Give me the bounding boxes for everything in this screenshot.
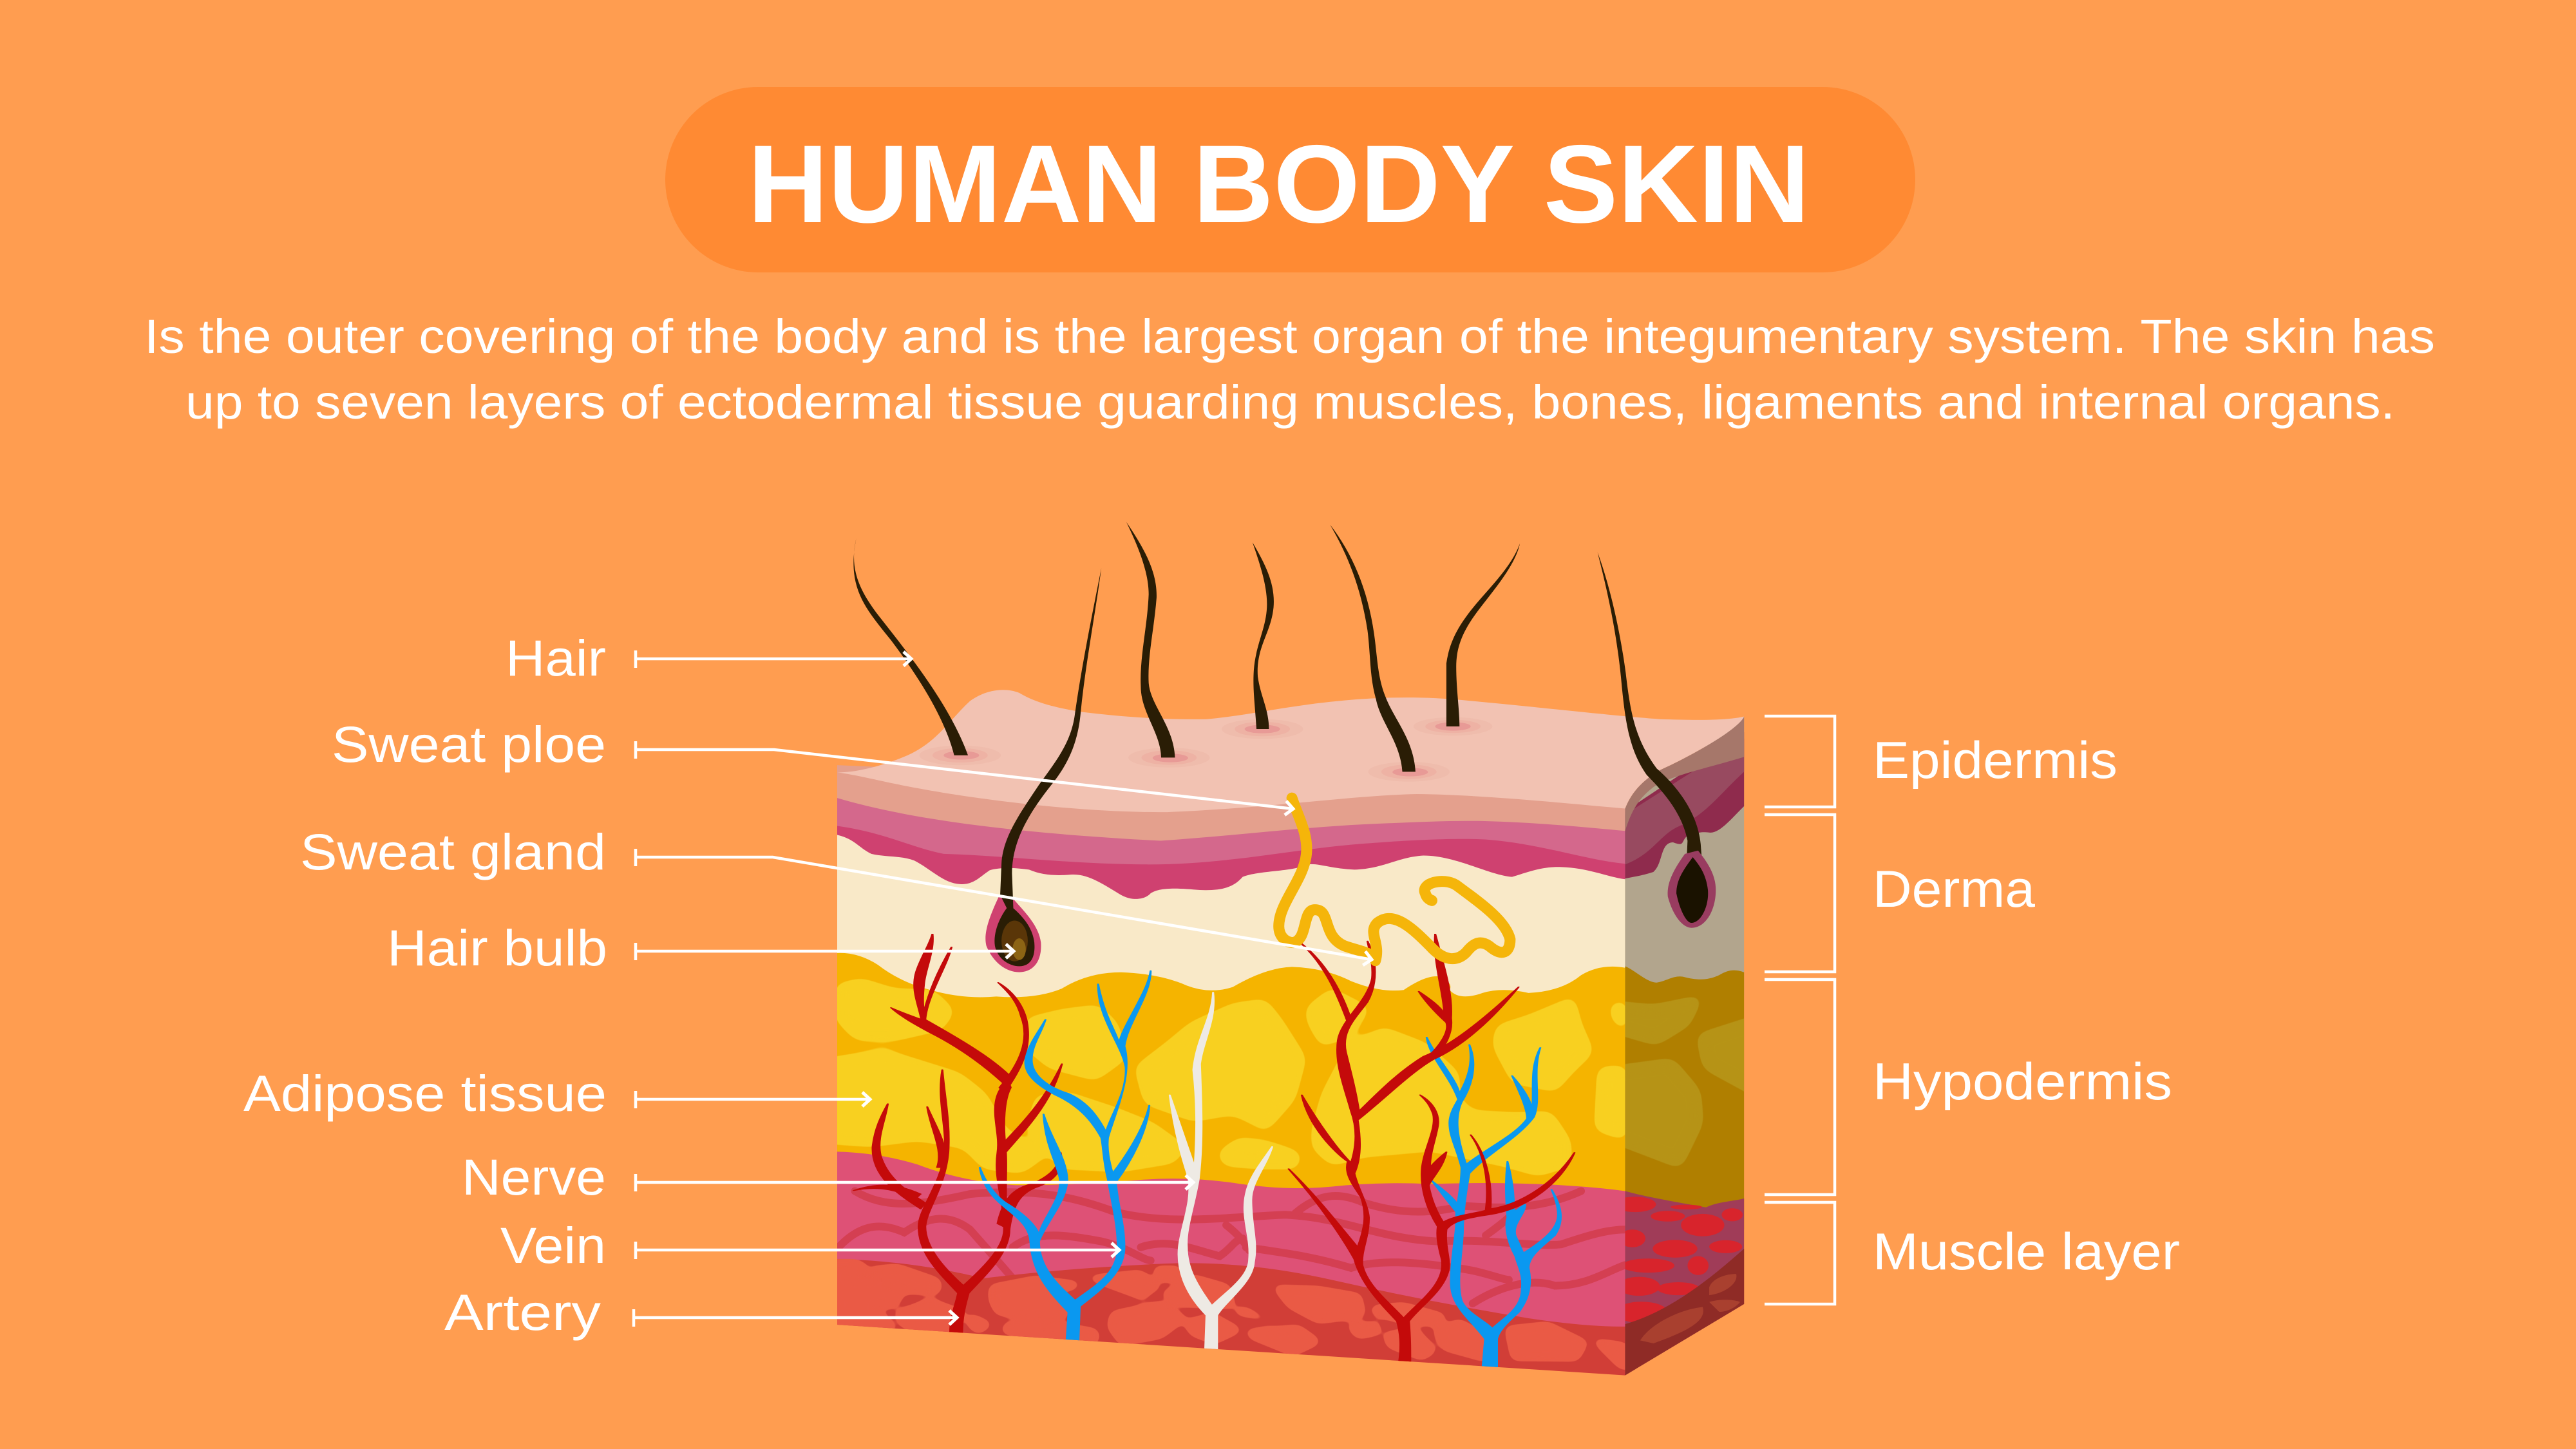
side face fat blobs (1625, 997, 1744, 1166)
title: HUMAN BODY SKIN (748, 122, 1810, 246)
hairs (853, 522, 1703, 908)
side brown layer (1625, 717, 1744, 831)
blood vessels and nerve (854, 934, 1575, 1368)
artery left (854, 934, 1062, 1333)
title (665, 87, 1915, 272)
side face muscle fibres (1614, 1197, 1743, 1323)
hairs, sweat gland and follicles (853, 522, 1716, 972)
skin cross-section diagram (812, 522, 1765, 1376)
mid pink layer (837, 791, 1625, 864)
left labels: Adipose tissue (243, 1065, 607, 1122)
skin surface (837, 690, 1744, 812)
left labels: Sweat ploe (332, 715, 606, 773)
side deep layer (1625, 732, 1744, 878)
layer brackets (1765, 716, 1835, 1304)
epidermis skin layers (837, 690, 1744, 899)
side face fat (1625, 967, 1744, 1229)
left labels: Vein (500, 1217, 606, 1274)
side face muscle (1625, 1191, 1744, 1376)
artery right (1289, 934, 1575, 1363)
sweat gland (1279, 798, 1510, 961)
deep pink layer (837, 798, 1625, 899)
deep red muscle layer (837, 1259, 1625, 1376)
adipose blobs (812, 978, 1627, 1177)
peach layer (837, 765, 1625, 841)
layer labels: Muscle layer (1873, 1223, 2180, 1281)
side face dark blobs (1640, 1274, 1740, 1343)
muscle fibre streaks (838, 1191, 1625, 1303)
hair bulb side (1668, 851, 1716, 928)
dermis base (837, 717, 1744, 1028)
vein left (980, 971, 1151, 1342)
fat and muscle layers (812, 953, 1765, 1376)
layer labels: Derma (1873, 860, 2036, 918)
left labels: Artery (444, 1283, 601, 1341)
intro text (144, 310, 2435, 429)
hair pores (920, 717, 1492, 782)
muscle blobs (812, 1260, 1653, 1368)
muscle layer pink (837, 1151, 1625, 1330)
intro text: up to seven layers of ectodermal tissue guarding muscles, bones, ligaments and internal organs. (185, 375, 2395, 429)
leader lines (634, 650, 1372, 1327)
layer labels: Epidermis (1873, 732, 2117, 790)
left labels (243, 629, 607, 1341)
side purple layer (1625, 739, 1744, 864)
left labels: Sweat gland (300, 823, 606, 880)
hair bulb left (985, 895, 1041, 972)
side face dark base (1625, 1249, 1744, 1376)
layer labels: Hypodermis (1873, 1053, 2172, 1111)
intro text: Is the outer covering of the body and is the largest organ of the integumentary system. The skin has (144, 310, 2435, 363)
nerve (1170, 992, 1273, 1350)
left labels: Nerve (462, 1148, 606, 1206)
left labels: Hair (506, 629, 606, 687)
left labels: Hair bulb (387, 919, 607, 976)
hypodermis fat layer (837, 953, 1625, 1200)
vein right (1426, 1037, 1561, 1368)
layer labels (1873, 732, 2180, 1281)
